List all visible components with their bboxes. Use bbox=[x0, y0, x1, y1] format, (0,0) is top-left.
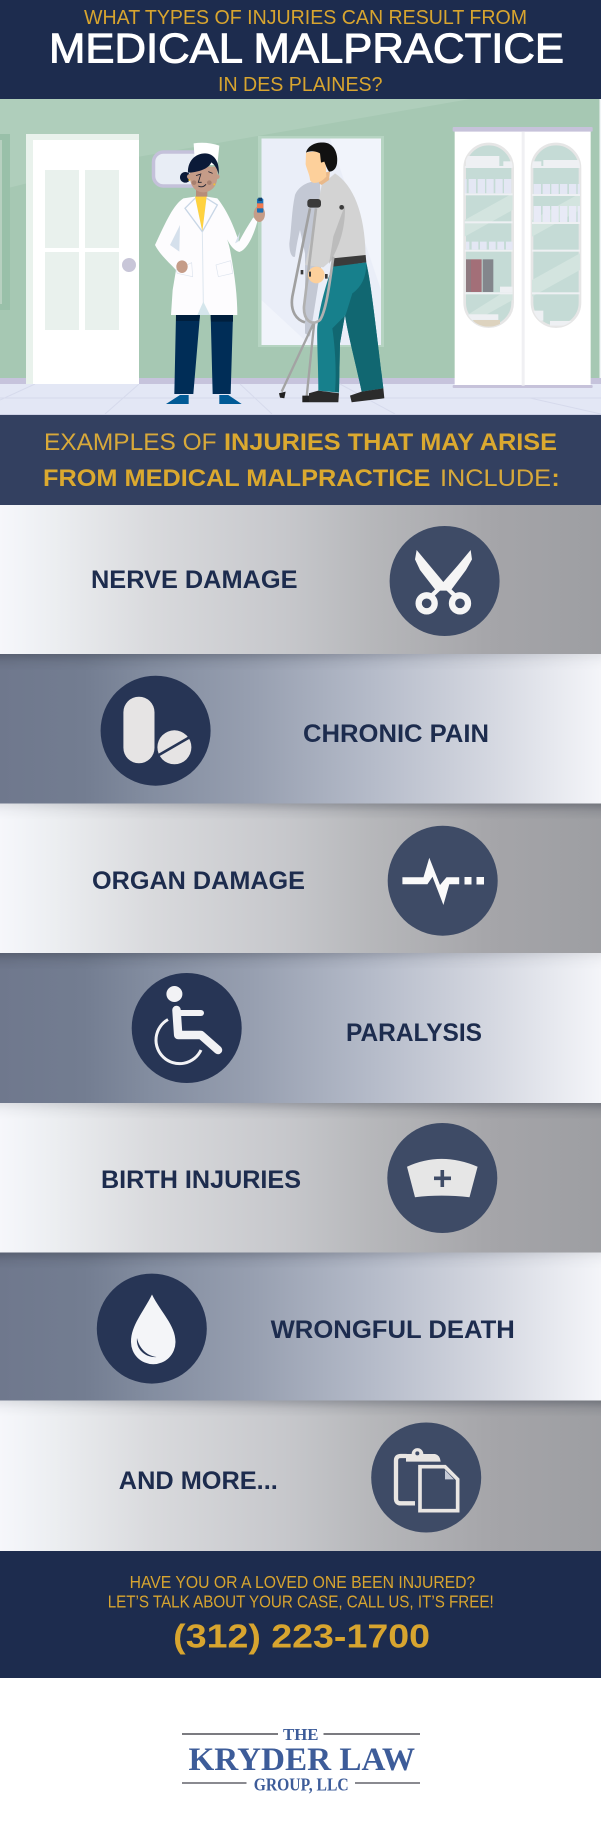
logo: the kryder law group bbox=[182, 1725, 420, 1794]
logo: the kryder law group: GROUP, LLC bbox=[254, 1774, 349, 1794]
label: nerve damage: NERVE DAMAGE bbox=[91, 567, 298, 594]
main title: MEDICAL MALPRACTICE bbox=[49, 25, 564, 72]
logo: the kryder law group: KRYDER LAW bbox=[188, 1742, 415, 1778]
wall mirror bbox=[258, 136, 384, 347]
panel: nerve damage bbox=[0, 505, 601, 654]
icon: wheelchair bbox=[132, 973, 242, 1083]
left cabinet contents bbox=[465, 156, 513, 327]
patient on crutches bbox=[279, 142, 384, 402]
left edge door frame bbox=[0, 134, 10, 310]
panel: birth injuries bbox=[0, 1103, 601, 1252]
logo: the kryder law group: THE bbox=[283, 1725, 318, 1744]
label: birth injuries: BIRTH INJURIES bbox=[101, 1167, 301, 1194]
label: chronic pain: CHRONIC PAIN bbox=[303, 721, 489, 748]
panel: chronic pain bbox=[0, 654, 601, 804]
icon: nurse cap bbox=[387, 1123, 497, 1233]
wall sign behind nurse bbox=[154, 152, 204, 186]
illustration: clinic scene bbox=[0, 99, 601, 416]
header banner bbox=[0, 0, 601, 100]
cabinet bbox=[453, 127, 593, 388]
header line one: WHAT TYPES OF INJURIES CAN RESULT FROM bbox=[84, 7, 527, 29]
heading colon: : bbox=[552, 465, 560, 492]
label: and more: AND MORE... bbox=[119, 1468, 278, 1495]
icon: clipboard bbox=[371, 1422, 481, 1532]
icon: scissors bbox=[390, 526, 500, 636]
right cabinet contents bbox=[532, 160, 580, 326]
icon: pills bbox=[101, 676, 211, 786]
nurse figure bbox=[155, 143, 265, 404]
heading line one bold: INJURIES THAT MAY ARISE bbox=[224, 429, 557, 456]
door bbox=[26, 134, 139, 384]
label: organ damage: ORGAN DAMAGE bbox=[92, 868, 305, 895]
panel: and more bbox=[0, 1400, 601, 1551]
call to action line one: HAVE YOU OR A LOVED ONE BEEN INJURED? bbox=[130, 1572, 476, 1592]
heading line one light: EXAMPLES OF bbox=[44, 429, 217, 456]
heading line two bold: FROM MEDICAL MALPRACTICE bbox=[43, 465, 430, 492]
label: paralysis: PARALYSIS bbox=[346, 1020, 482, 1047]
label: wrongful death: WRONGFUL DEATH bbox=[271, 1317, 515, 1344]
call to action line two: LET’S TALK ABOUT YOUR CASE, CALL US, IT’S FREE! bbox=[108, 1592, 494, 1612]
heading line two light: INCLUDE bbox=[440, 465, 551, 492]
baseboard and floor bbox=[0, 378, 601, 416]
panel: wrongful death bbox=[0, 1252, 601, 1400]
panel: paralysis bbox=[0, 953, 601, 1103]
phone number: (312) 223-1700 bbox=[173, 1618, 430, 1656]
panel: examples heading bbox=[0, 415, 601, 506]
icon: water drop bbox=[97, 1274, 207, 1384]
icon: heartbeat bbox=[388, 826, 498, 936]
panel: call to action footer bbox=[0, 1551, 601, 1678]
panel: organ damage bbox=[0, 804, 601, 953]
header line three: IN DES PLAINES? bbox=[218, 74, 382, 96]
